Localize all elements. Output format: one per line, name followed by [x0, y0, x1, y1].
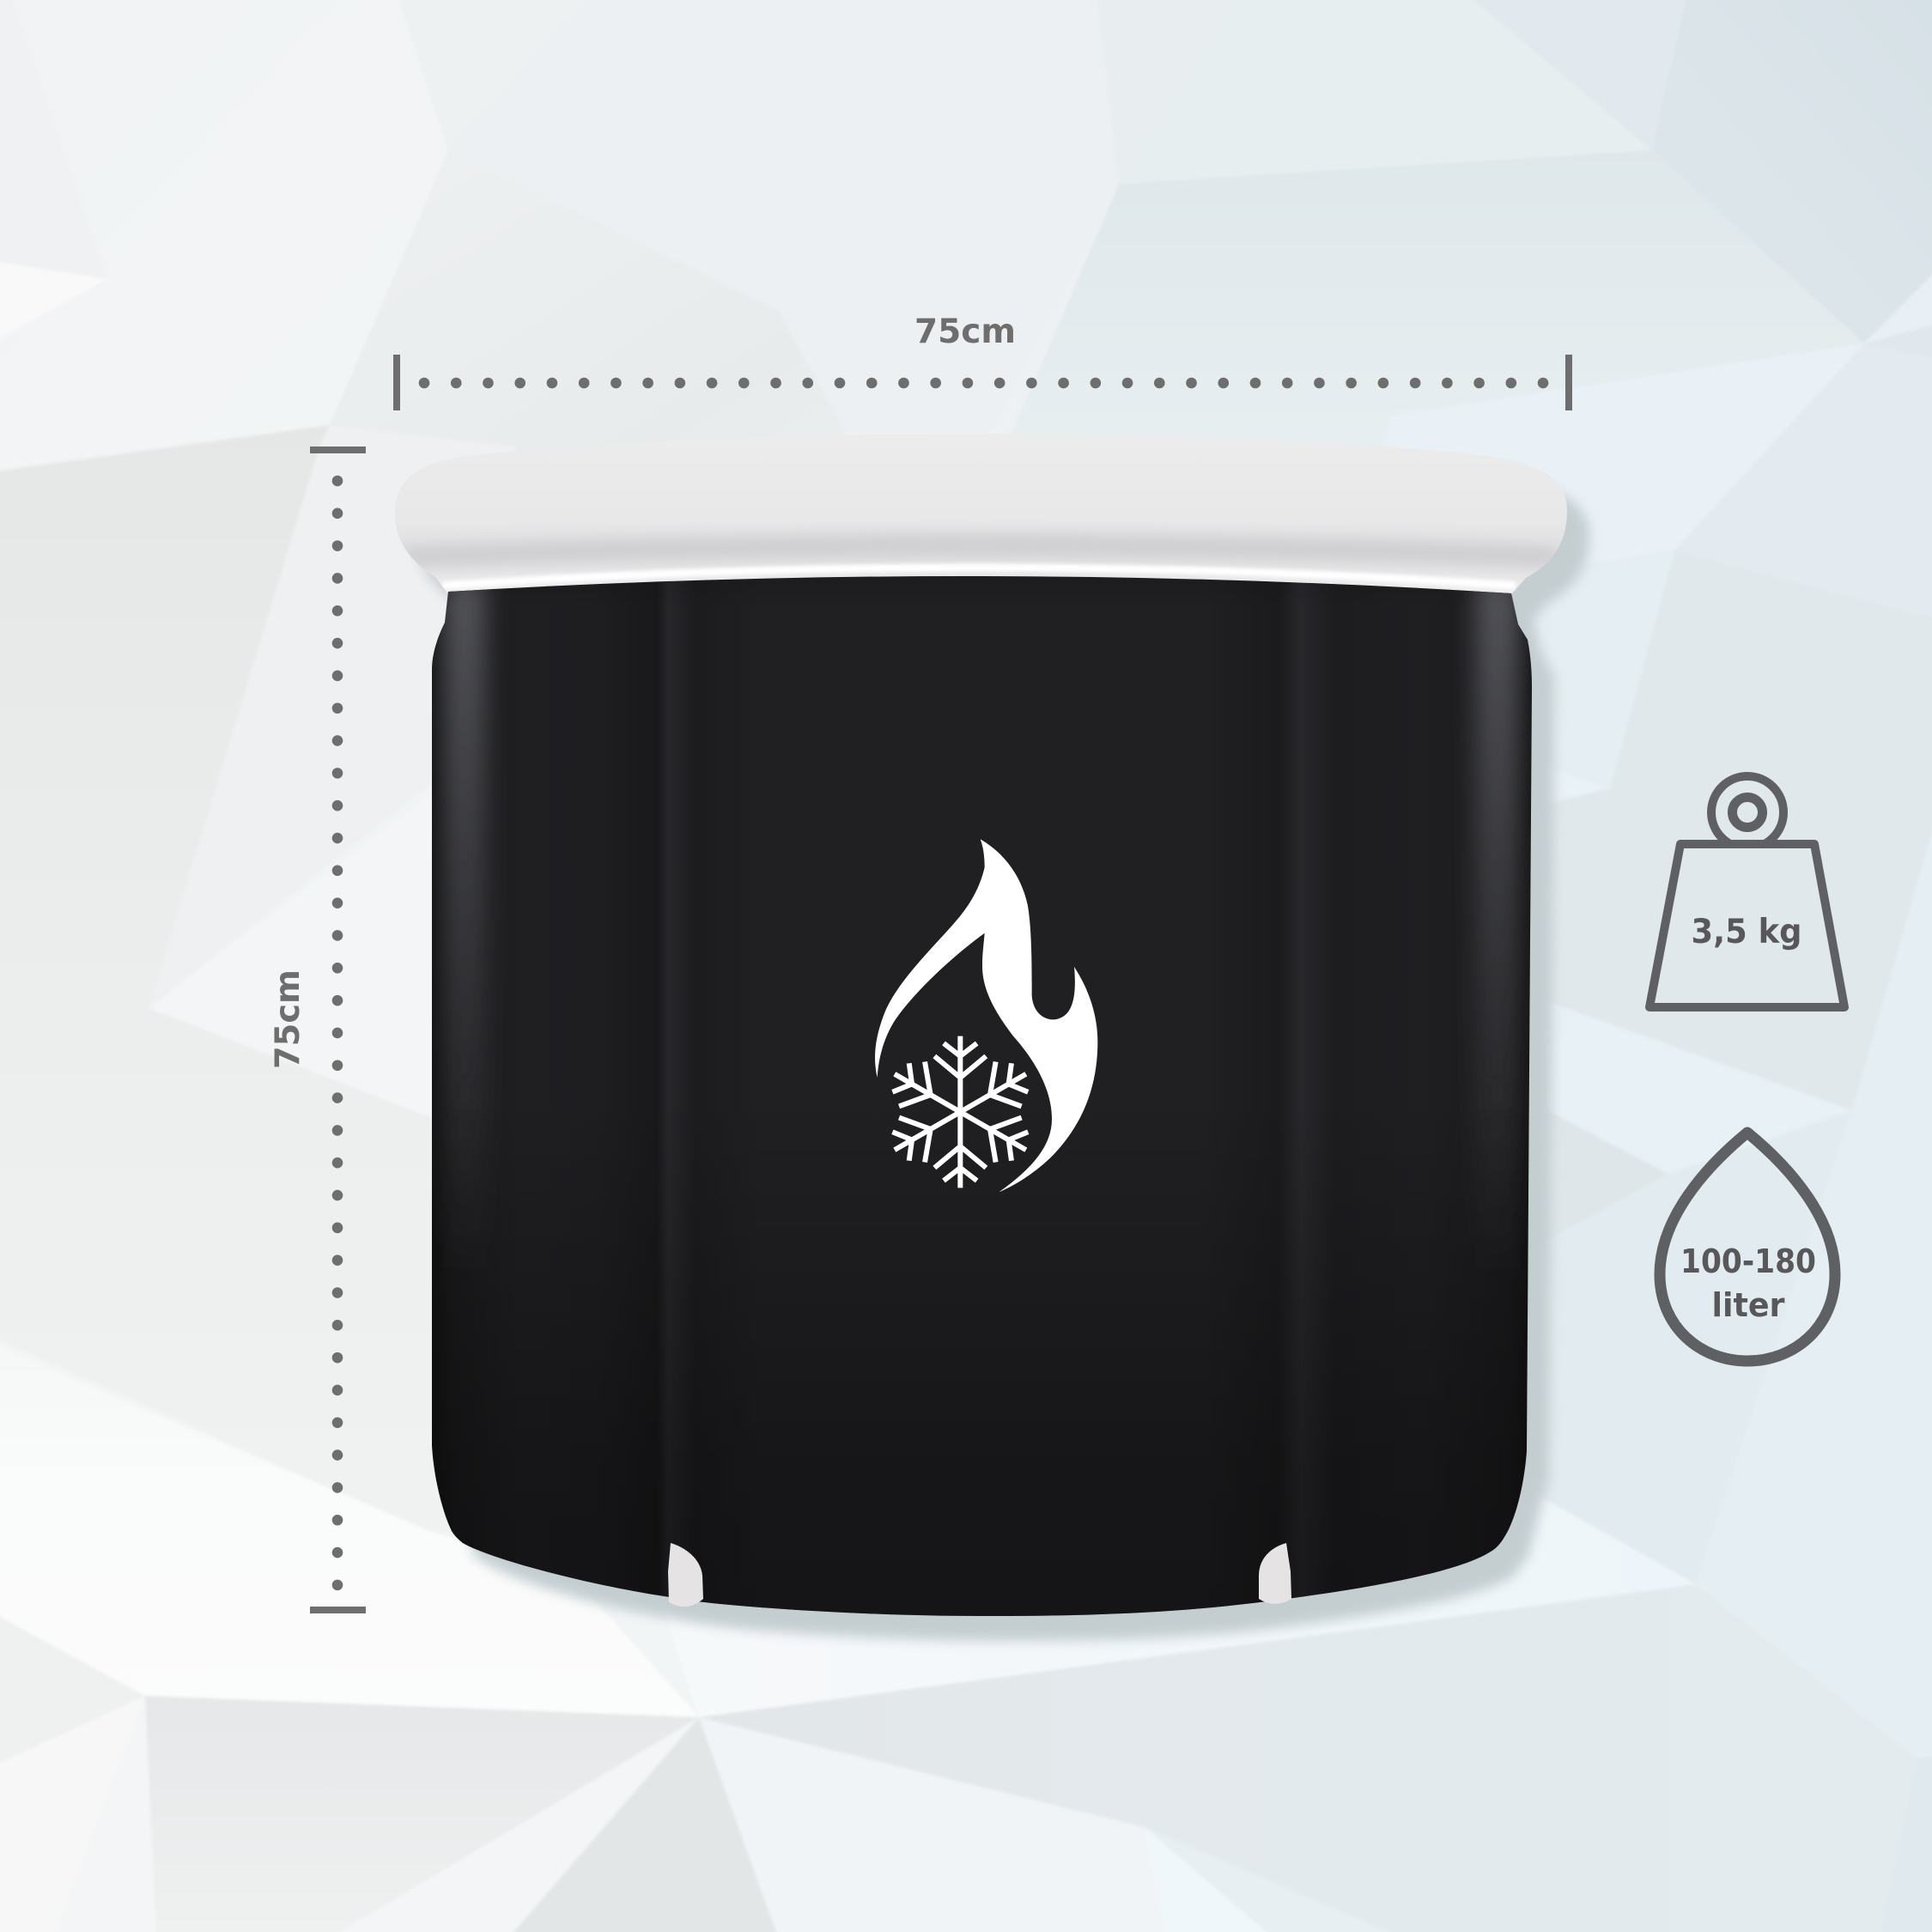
- tub left foot clip: [668, 1543, 703, 1607]
- icon: water drop 100-180 liter: liter: [1712, 1286, 1785, 1324]
- icon: water drop 100-180 liter: [1660, 1133, 1835, 1361]
- left height dimension: 75cm: 75cm: [269, 969, 307, 1069]
- snowflake: [882, 1036, 1039, 1188]
- logo: flame with snowflake: [875, 839, 1097, 1192]
- tub inflatable rim: [395, 434, 1567, 594]
- icon: water drop 100-180 liter: 100-180: [1680, 1242, 1816, 1280]
- flame: [875, 839, 1097, 1192]
- ice bath tub: [395, 434, 1567, 1623]
- icon: weight 3,5 kg: 3,5 kg: [1692, 913, 1801, 951]
- tub black body: [432, 576, 1532, 1616]
- tub drop shadow: [417, 459, 1589, 1641]
- tub right foot clip: [1259, 1543, 1291, 1604]
- icon: weight 3,5 kg: [1649, 776, 1844, 1007]
- left height dimension: 75cm: [269, 447, 366, 1613]
- top width dimension: 75cm: 75cm: [914, 313, 1016, 351]
- tub side highlights and shading: [421, 558, 1546, 1623]
- top width dimension: 75cm: [393, 313, 1572, 410]
